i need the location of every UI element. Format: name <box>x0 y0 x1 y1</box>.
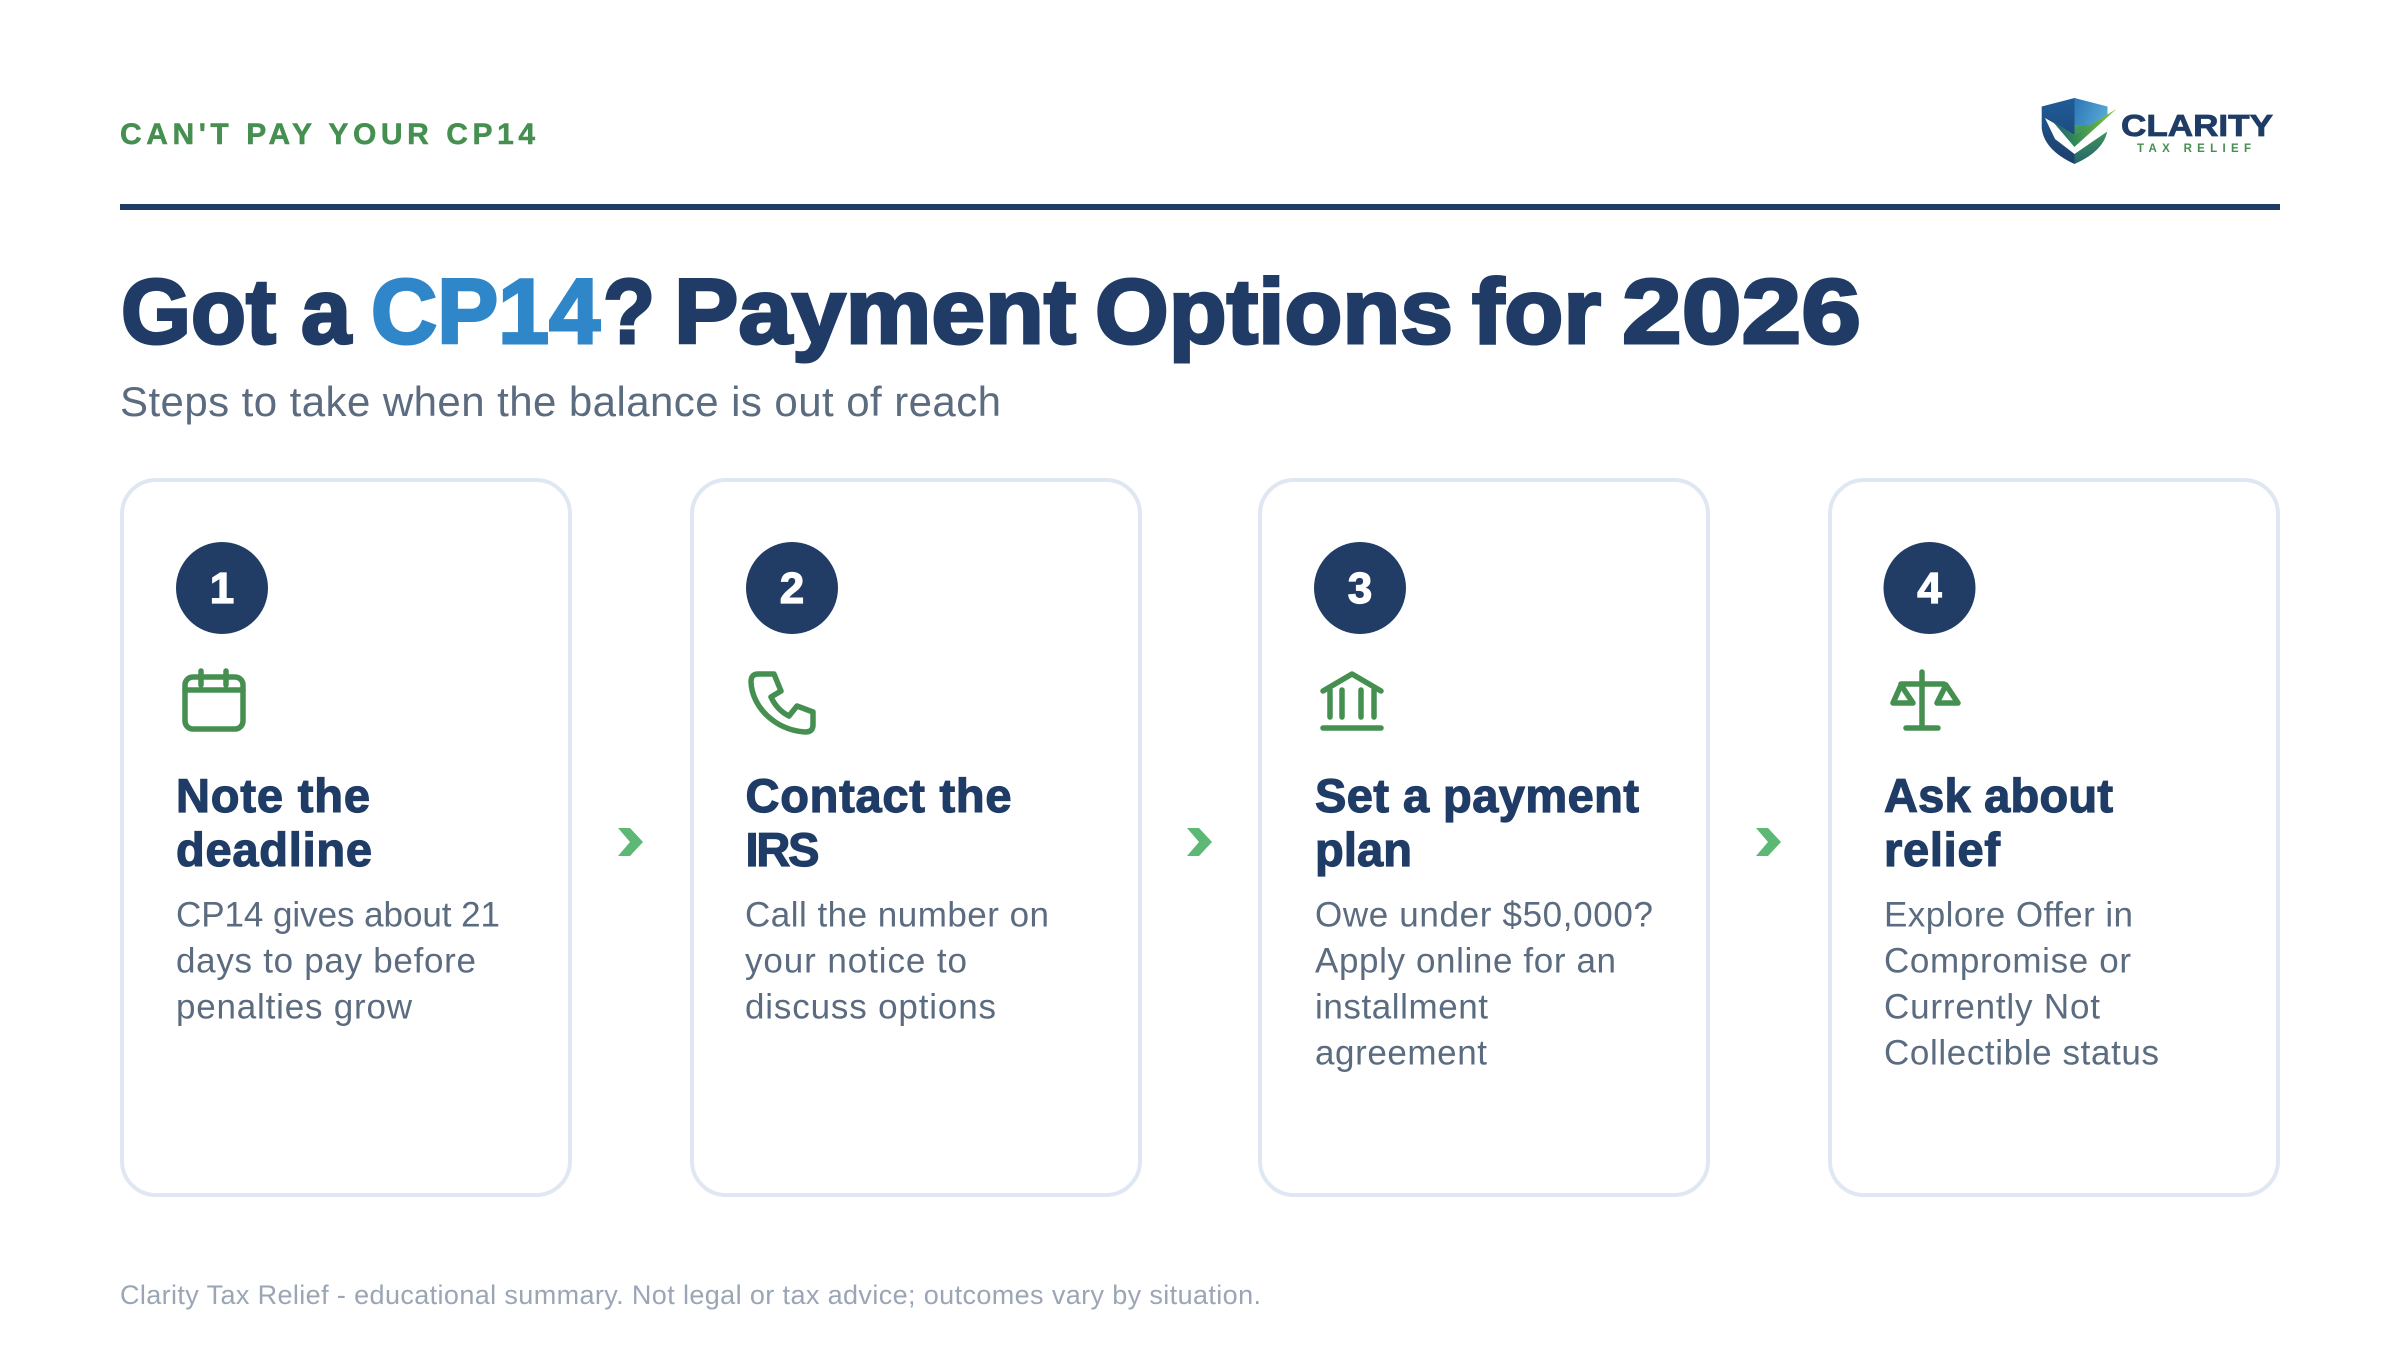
panel: step 2 <box>692 480 1140 1195</box>
step 3 description: agreement <box>1315 1034 1487 1072</box>
step 1 description: CP14 gives about 21 <box>176 896 500 934</box>
step 1 description: days to pay before <box>176 942 476 980</box>
step 4 description: Currently Not <box>1884 988 2100 1026</box>
step number 1 <box>176 542 268 634</box>
icon: phone <box>751 674 813 732</box>
icon: bank <box>1323 674 1381 728</box>
arrow 3 to 4 <box>1756 828 1781 856</box>
step number 3: 3 <box>1348 564 1372 613</box>
step 1 heading: deadline <box>176 823 372 876</box>
logo tagline: TAX RELIEF <box>2137 143 2251 155</box>
step 4 heading <box>1884 769 2113 876</box>
step 3 heading: Set a payment <box>1315 769 1639 822</box>
step 1 description: penalties grow <box>176 988 413 1026</box>
step 3 description: Apply online for an <box>1315 942 1616 980</box>
step 1 description <box>176 896 500 1026</box>
icon: calendar <box>185 671 243 729</box>
icon: scales <box>1893 672 1958 728</box>
step 4 heading: relief <box>1884 823 2000 876</box>
step 3 heading <box>1315 769 1639 876</box>
step 4 description: Explore Offer in <box>1884 896 2133 934</box>
eyebrow label: CAN'T PAY YOUR CP14 <box>120 118 535 151</box>
title: for <box>1472 261 1601 363</box>
title: CP14 <box>371 261 600 363</box>
footer disclaimer: Clarity Tax Relief - educational summary. Not legal or tax advice; outcomes vary by situation. <box>120 1280 1261 1310</box>
title: Payment <box>674 261 1076 363</box>
step number 1: 1 <box>210 564 234 613</box>
step 2 heading <box>746 769 1012 876</box>
panel: step 3 <box>1260 480 1708 1195</box>
title: Options <box>1095 261 1453 363</box>
arrow 1 to 2 <box>618 828 643 856</box>
step number 2 <box>746 542 838 634</box>
logo wordmark: CLARITY <box>2121 108 2273 143</box>
step 2 description: your notice to <box>745 942 967 980</box>
step 2 description: Call the number on <box>745 896 1049 934</box>
step 1 heading: Note the <box>176 769 370 822</box>
step number 2: 2 <box>780 564 804 613</box>
title: ? <box>603 261 655 363</box>
step 4 heading: Ask about <box>1884 769 2113 822</box>
header rule <box>120 204 2280 210</box>
subtitle: Steps to take when the balance is out of reach <box>120 378 1001 425</box>
step 3 heading: plan <box>1315 823 1412 876</box>
step 1 heading <box>176 769 372 876</box>
arrow 2 to 3 <box>1187 828 1212 856</box>
title: 2026 <box>1622 261 1861 363</box>
panel: step 1 <box>122 480 570 1195</box>
step 3 description <box>1315 896 1653 1072</box>
step 3 description: Owe under $50,000? <box>1315 896 1653 934</box>
title <box>121 261 1861 363</box>
step number 4: 4 <box>1917 564 1942 613</box>
step 2 description: discuss options <box>745 988 996 1026</box>
title: Got a <box>121 261 352 363</box>
logo shield <box>2040 96 2117 166</box>
step 2 heading: Contact the <box>746 769 1012 822</box>
panel: step 4 <box>1830 480 2278 1195</box>
step number 3 <box>1314 542 1406 634</box>
step 2 description <box>745 896 1049 1026</box>
step 4 description <box>1884 896 2159 1072</box>
step 4 description: Compromise or <box>1884 942 2131 980</box>
step number 4 <box>1884 542 1976 634</box>
step 2 heading: IRS <box>746 823 820 876</box>
step 4 description: Collectible status <box>1884 1034 2159 1072</box>
step 3 description: installment <box>1315 988 1488 1026</box>
logo: Clarity Tax Relief <box>2040 96 2273 166</box>
